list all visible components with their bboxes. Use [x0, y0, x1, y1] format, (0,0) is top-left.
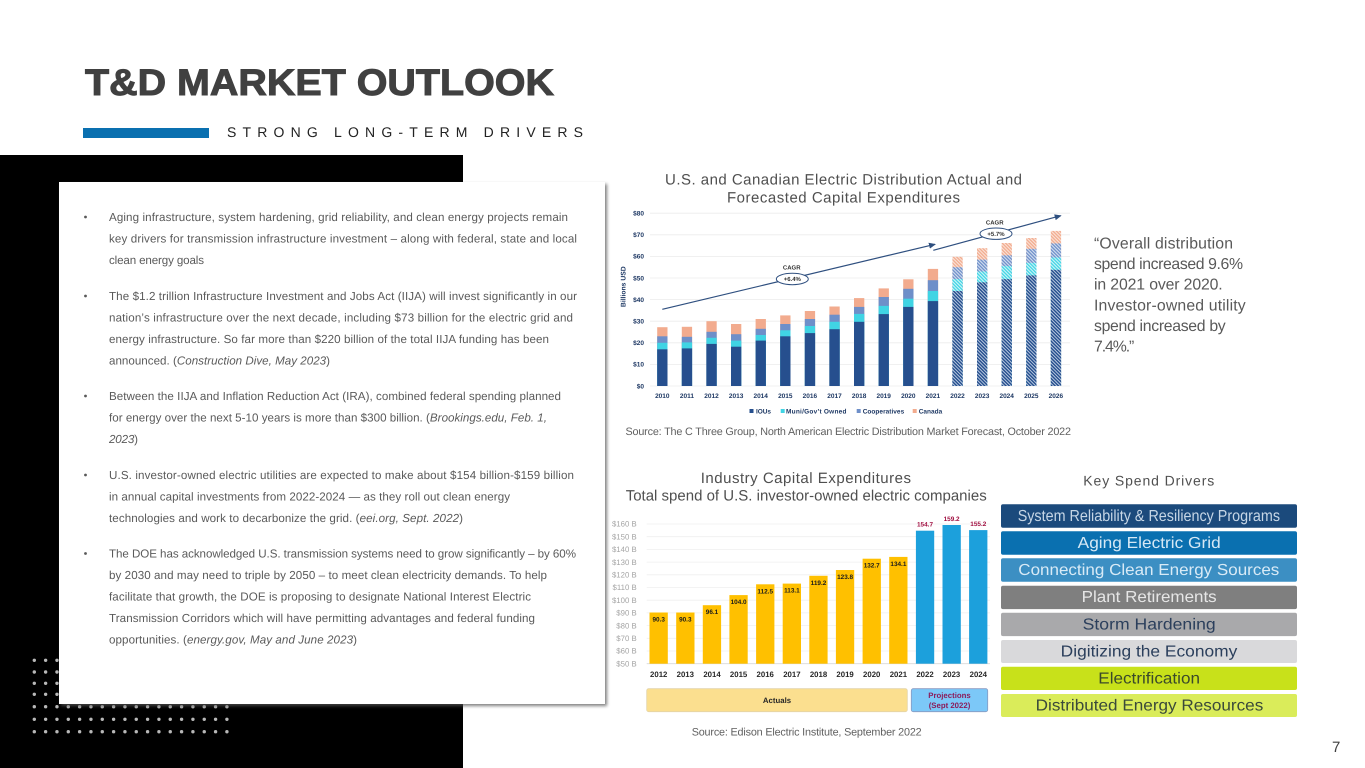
legend: Cooperatives: [863, 408, 905, 416]
subtitle: STRONG LONG-TERM DRIVERS: [227, 124, 583, 140]
x axis labels: 2022: [916, 670, 934, 679]
x axis labels: 2025: [1024, 393, 1039, 400]
bullet: IIJA: The $1.2 trillion Infrastructure Investment and Jobs Act (IIJA) will invest significantly in our: [109, 290, 577, 303]
chart heading: Forecasted Capital Expenditures: [727, 190, 960, 207]
y axis labels: [612, 520, 637, 668]
chart: distribution capital expenditures: [620, 171, 1071, 438]
y axis labels: $90 B: [616, 609, 637, 618]
bullet: IRA: 2023): [108, 433, 138, 446]
x axis labels: 2018: [810, 670, 828, 679]
x axis labels: 2024: [970, 670, 988, 679]
x axis labels: [655, 393, 1064, 400]
CAGR arrow: forecast: +5.7%: [987, 231, 1005, 238]
bullet: IRA: Between the IIJA and Inflation Reduction Act (IRA), combined federal spending planned: [109, 390, 561, 403]
callout: quote: spend increased 9.6%: [1094, 256, 1243, 273]
CAGR arrow: actuals: CAGR: [783, 264, 801, 272]
callout: quote: spend increased by: [1094, 318, 1226, 335]
driver: electrification: [1001, 667, 1297, 690]
bullet: IIJA: announced. (Construction Dive, May 2023): [109, 354, 330, 368]
y axis labels: $100 B: [612, 596, 637, 605]
x axis labels: 2019: [836, 670, 854, 679]
y axis labels: $70 B: [616, 634, 637, 643]
projections bracket: [911, 689, 988, 712]
x axis labels: 2013: [677, 670, 695, 679]
value labels: 104.0: [731, 599, 747, 606]
driver: plant retirements: [1001, 586, 1297, 609]
y axis title: Billions USD: [620, 266, 628, 307]
projections bracket: Projections: [928, 691, 971, 700]
chart heading: [665, 171, 1022, 207]
bullet: aging infrastructure: clean energy goals: [109, 254, 204, 267]
chart: industry capital expenditures: [612, 470, 990, 739]
y axis labels: $50 B: [616, 659, 637, 668]
driver: system reliability: System Reliability & Resiliency Programs: [1018, 508, 1280, 525]
y axis labels: $150 B: [612, 532, 637, 541]
chart heading: Total spend of U.S. investor-owned electric companies: [626, 488, 987, 505]
chart heading: Industry Capital Expenditures: [701, 470, 911, 487]
driver: aging grid: Aging Electric Grid: [1078, 535, 1221, 552]
bullet: DOE: Transmission Corridors which will have permitting advantages and federal funding: [109, 612, 535, 625]
black background block: [0, 155, 463, 768]
driver: storm hardening: Storm Hardening: [1083, 616, 1216, 634]
bullet: IRA: for energy over the next 5-10 years is more than $300 billion. (Brookings.edu, Feb. 1,: [109, 412, 547, 424]
bullet: utilities capital investment: U.S. investor-owned electric utilities are expected to make about $154 billion-$159 billion: [109, 469, 574, 482]
driver: clean energy: [1001, 558, 1297, 582]
callout: quote: “Overall distribution: [1094, 235, 1233, 252]
bullet: utilities capital investment: in annual capital investments from 2022-2024 — as they roll out clean energy: [109, 490, 510, 504]
value labels: 90.3: [679, 616, 692, 624]
chart source: Source: The C Three Group, North American Electric Distribution Market Forecast, October 2022: [626, 426, 1071, 438]
bullet: DOE: The DOE has acknowledged U.S. transmission systems need to grow significantly – by 60%: [109, 548, 576, 560]
y axis labels: $80 B: [616, 621, 637, 630]
x axis labels: 2010: [655, 393, 670, 400]
x axis labels: 2020: [901, 393, 916, 400]
actuals bracket: Actuals: [763, 696, 792, 705]
x axis labels: 2013: [729, 393, 744, 400]
heading: Key Spend Drivers: [1083, 473, 1214, 489]
x axis labels: 2018: [852, 393, 867, 400]
bullet: IRA: [84, 390, 561, 446]
x axis labels: 2023: [943, 670, 961, 679]
value labels: 90.3: [652, 616, 665, 624]
y axis labels: $60: [633, 254, 644, 261]
x axis labels: 2015: [778, 393, 793, 400]
CAGR arrow: actuals: +6.4%: [784, 276, 802, 283]
driver: digitizing: Digitizing the Economy: [1061, 644, 1237, 660]
bullet: DOE: opportunities. (energy.gov, May and June 2023): [109, 634, 357, 646]
value labels: 123.8: [837, 574, 854, 581]
callout: quote: Investor-owned utility: [1094, 297, 1246, 314]
y axis labels: $60 B: [616, 647, 637, 656]
value labels: 96.1: [706, 609, 719, 616]
bullet: aging infrastructure: Aging infrastructure, system hardening, grid reliability, and clean energy projects remain: [109, 211, 568, 224]
value labels: 112.5: [757, 588, 773, 595]
driver: plant retirements: Plant Retirements: [1082, 589, 1217, 606]
driver: distributed energy: Distributed Energy Resources: [1036, 698, 1263, 714]
x axis labels: 2014: [753, 393, 768, 400]
chart source: Source: Edison Electric Institute, September 2022: [692, 727, 922, 739]
y axis labels: $40: [633, 297, 644, 304]
x axis labels: 2012: [704, 393, 719, 400]
bullet: utilities capital investment: [84, 469, 574, 525]
bullet: aging infrastructure: [84, 211, 577, 267]
x axis labels: 2015: [730, 670, 748, 679]
value labels: [652, 516, 987, 624]
callout: quote: 7.4%.”: [1094, 339, 1134, 356]
x axis labels: 2016: [757, 670, 775, 679]
legend: Muni/Gov’t Owned: [786, 408, 847, 416]
bullet: utilities capital investment: technologies and work to decarbonize the grid. (eei.org, Sept. 2022): [109, 512, 463, 525]
driver: distributed energy: [1001, 694, 1297, 717]
x axis labels: 2016: [803, 393, 818, 400]
y axis labels: [633, 210, 644, 390]
y axis labels: $120 B: [612, 570, 637, 580]
driver: electrification: Electrification: [1098, 670, 1200, 688]
bullet: IIJA: energy infrastructure. So far more than $220 billion of the total IIJA funding has been: [109, 333, 549, 346]
value labels: 155.2: [970, 521, 987, 528]
driver: system reliability: [1001, 504, 1297, 528]
x axis labels: 2024: [999, 393, 1014, 400]
y axis labels: $140 B: [612, 545, 637, 554]
dot pattern: [34, 660, 228, 732]
driver: storm hardening: [1001, 613, 1297, 636]
y axis labels: $0: [637, 383, 644, 390]
panel: key drivers text: [59, 182, 607, 706]
key spend drivers: [1001, 473, 1297, 717]
actuals bracket: [647, 689, 907, 712]
bullet: DOE: facilitate that growth, the DOE is proposing to designate National Interest Electric: [109, 590, 531, 604]
bullet: aging infrastructure: key drivers for transmission infrastructure investment – along with federal, state and local: [109, 232, 577, 246]
x axis labels: [650, 670, 988, 679]
x axis labels: 2023: [975, 393, 990, 400]
y axis labels: $110 B: [613, 583, 637, 592]
y axis labels: $50: [633, 275, 644, 282]
chart heading: [626, 470, 987, 505]
value labels: 119.2: [811, 580, 827, 587]
driver: digitizing: [1001, 640, 1297, 663]
accent bar: [83, 128, 209, 138]
projections bracket: (Sept 2022): [929, 701, 971, 710]
value labels: 154.7: [917, 522, 933, 528]
chart heading: U.S. and Canadian Electric Distribution Actual and: [665, 171, 1022, 188]
value labels: 134.1: [890, 561, 907, 568]
value labels: 113.1: [784, 588, 800, 595]
y axis labels: $160 B: [612, 520, 637, 529]
CAGR arrow: actuals: [662, 244, 935, 309]
callout: quote: [1094, 235, 1246, 356]
bullet: IIJA: [84, 290, 577, 368]
x axis labels: 2012: [650, 670, 668, 679]
x axis labels: 2026: [1049, 393, 1064, 400]
y axis labels: $70: [633, 232, 644, 239]
x axis labels: 2022: [950, 393, 965, 400]
legend: IOUs: [756, 408, 771, 416]
y axis labels: $30: [633, 318, 644, 326]
bullet: IIJA: nation’s infrastructure over the next decade, including $73 billion for the electric grid and: [109, 312, 573, 324]
stacked bars: forecast 2022-2026: [952, 231, 1061, 386]
y axis labels: $20: [633, 340, 644, 347]
bullet: DOE: by 2030 and may need to triple by 2050 – to meet clean electricity demands. To help: [109, 569, 547, 582]
y axis labels: $130 B: [612, 558, 637, 567]
bullet: DOE: [84, 548, 576, 646]
x axis labels: 2021: [890, 670, 908, 679]
x axis labels: 2019: [876, 393, 891, 400]
x axis labels: 2020: [863, 670, 881, 679]
driver: clean energy: Connecting Clean Energy Sources: [1018, 562, 1279, 579]
driver: aging grid: [1001, 531, 1297, 555]
CAGR arrow: forecast: [933, 216, 1061, 250]
value labels: 159.2: [944, 516, 960, 523]
title: T&D MARKET OUTLOOK: [85, 62, 554, 103]
x axis labels: 2021: [926, 393, 941, 400]
x axis labels: 2014: [703, 670, 721, 679]
bars: actuals: [650, 557, 908, 664]
x axis labels: 2011: [680, 393, 694, 400]
value labels: 132.7: [864, 563, 880, 570]
page number: 7: [1332, 739, 1340, 756]
y axis labels: $10: [633, 362, 644, 369]
x axis labels: 2017: [827, 393, 842, 400]
CAGR arrow: forecast: CAGR: [986, 220, 1004, 226]
callout: quote: in 2021 over 2020.: [1094, 277, 1223, 294]
bars: projections: [916, 525, 987, 664]
stacked bars: actuals 2010-2021: [657, 269, 938, 386]
legend: Canada: [919, 408, 943, 416]
x axis labels: 2017: [783, 670, 801, 679]
legend: [750, 408, 943, 416]
y axis labels: $80: [633, 210, 644, 218]
